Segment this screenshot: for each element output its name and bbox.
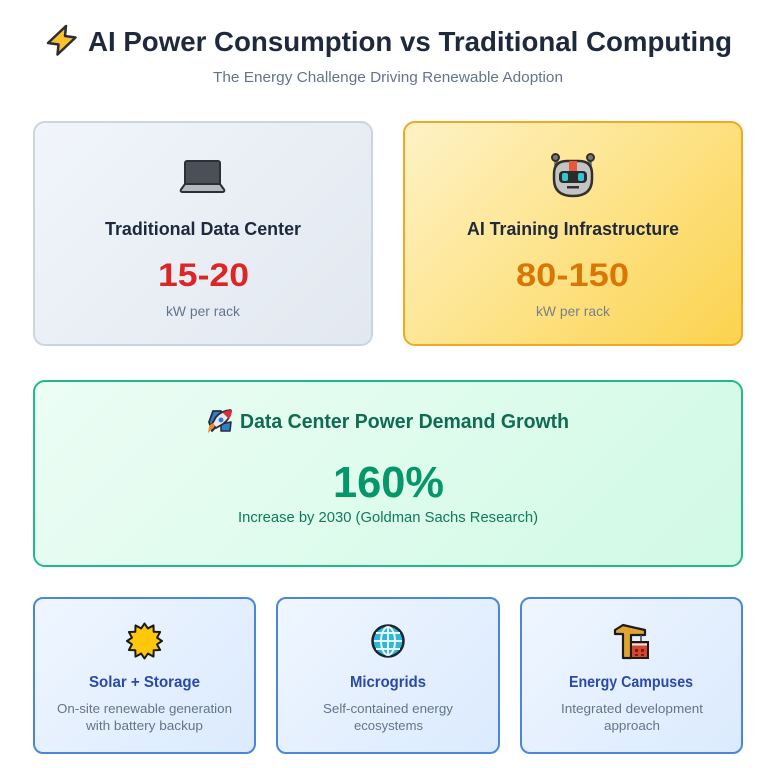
- icon: robot: [552, 154, 594, 196]
- icon: globe: [372, 626, 404, 656]
- icon: rocket: [209, 410, 232, 431]
- panel: traditional data center: [34, 122, 372, 345]
- description: with battery backup: [85, 718, 203, 733]
- heading: microgrids: Microgrids: [350, 674, 426, 691]
- description: approach: [604, 718, 660, 733]
- subtitle: The Energy Challenge Driving Renewable Adoption: [213, 69, 563, 86]
- heading: energy campuses: Energy Campuses: [569, 674, 693, 691]
- icon: lightning bolt: [48, 26, 76, 54]
- panel: ai training infrastructure: [404, 122, 742, 345]
- description: ecosystems: [354, 718, 423, 733]
- title: AI Power Consumption vs Traditional Computing: [88, 26, 732, 57]
- unit label: kW per rack: [536, 303, 611, 319]
- icon: sun: [127, 624, 162, 658]
- panel: microgrids: [277, 598, 499, 753]
- icon: crane and building: [615, 625, 648, 658]
- heading: power demand growth: Data Center Power Demand Growth: [240, 411, 569, 433]
- panel: solar + storage: [34, 598, 255, 753]
- heading: traditional data center: Traditional Data Center: [105, 219, 301, 239]
- value: 160%: 160%: [333, 458, 444, 507]
- value: 80-150: 80-150: [516, 257, 629, 293]
- value: 15-20: 15-20: [158, 257, 249, 293]
- panel: power demand growth: [34, 381, 742, 566]
- unit label: kW per rack: [166, 303, 241, 319]
- icon: laptop: [181, 161, 224, 192]
- description: Self-contained energy: [323, 701, 453, 716]
- heading: solar + storage: Solar + Storage: [89, 674, 200, 691]
- heading: ai training infrastructure: AI Training Infrastructure: [467, 219, 679, 239]
- panel: energy campuses: [521, 598, 742, 753]
- source note: Increase by 2030 (Goldman Sachs Research): [238, 510, 538, 526]
- description: Integrated development: [561, 701, 703, 716]
- description: On-site renewable generation: [57, 701, 232, 716]
